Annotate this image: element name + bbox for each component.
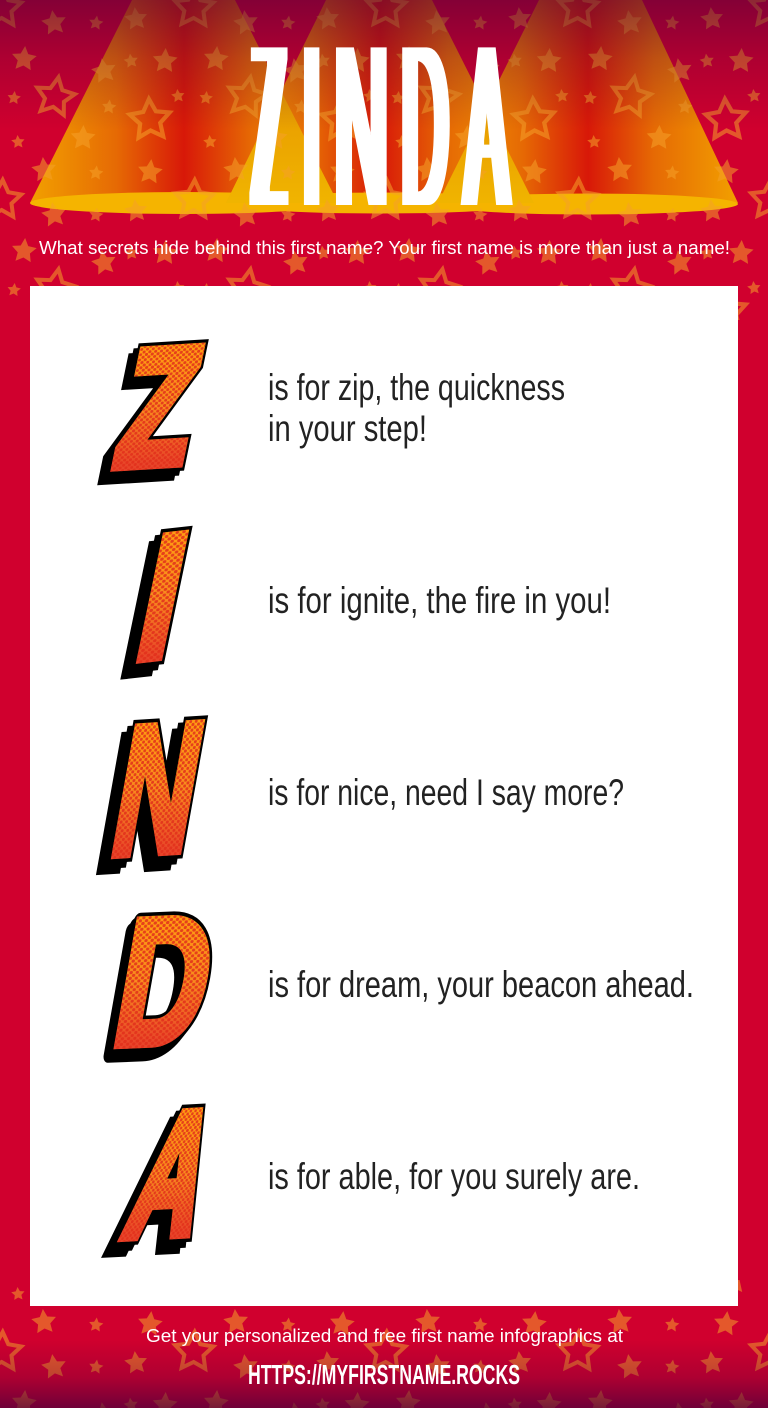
comic letter Z: Z (95, 322, 204, 511)
text: A meaning: is for able, for you surely are. (268, 1156, 640, 1197)
comic letter Z: Z (105, 312, 214, 501)
bottom shading (0, 1340, 768, 1408)
comic letter N: N (94, 689, 210, 901)
comic letter Z: Z (105, 312, 214, 501)
comic letter A: A (110, 1074, 237, 1273)
row: I (111, 496, 611, 711)
comic letter N: N (100, 683, 216, 895)
title: N (335, 0, 388, 257)
comic letter D: D (98, 885, 223, 1089)
spotlight overlap: right (438, 107, 534, 203)
comic letter D: D (102, 880, 227, 1084)
spotlight overlap: left (226, 91, 338, 203)
text: Z meaning (268, 367, 565, 449)
star pattern: header (0, 0, 768, 320)
text: Z meaning: is for zip, the quickness (268, 367, 565, 408)
title: Z (256, 0, 282, 257)
comic letter N: N (88, 695, 204, 907)
spotlight: right (438, 0, 738, 214)
panel: white content card (30, 286, 738, 1306)
row: A (98, 1074, 640, 1285)
spotlights (30, 0, 738, 214)
title (256, 0, 508, 258)
comic letter I: I (123, 496, 202, 699)
comic letter A: A (98, 1086, 225, 1285)
row: Z (95, 312, 565, 511)
comic letter I: I (123, 496, 202, 699)
text: I meaning: is for ignite, the fire in you! (268, 580, 611, 621)
comic letter D: D (94, 890, 219, 1094)
footer url: HTTPS://MYFIRSTNAME.ROCKS (248, 1359, 520, 1390)
row: N (88, 683, 624, 907)
comic letter N: N (100, 683, 216, 895)
comic letter D: D (102, 880, 227, 1084)
row: D (94, 880, 694, 1094)
spotlight: left (30, 0, 338, 214)
star pattern: footer (0, 1280, 768, 1408)
comic letter A: A (110, 1074, 237, 1273)
comic letter I: I (117, 502, 196, 705)
comic letter A: A (104, 1080, 231, 1279)
title: A (466, 0, 508, 258)
text: Z meaning: in your step! (268, 408, 427, 449)
comic letter I: I (123, 496, 202, 699)
title: I (304, 0, 320, 258)
text: N meaning: is for nice, need I say more? (268, 772, 624, 813)
footer text: Get your personalized and free first name infographics at (146, 1326, 623, 1346)
comic letter A: A (110, 1074, 237, 1273)
title: D (402, 0, 448, 258)
comic letter N: N (100, 683, 216, 895)
comic letter Z: Z (100, 317, 209, 506)
top shading (0, 0, 768, 130)
comic letter I: I (111, 508, 190, 711)
comic letter Z: Z (105, 312, 214, 501)
subtitle: What secrets hide behind this first name? Your first name is more than just a name! (39, 238, 730, 258)
spotlight: middle (226, 0, 534, 214)
comic letter D: D (102, 880, 227, 1084)
